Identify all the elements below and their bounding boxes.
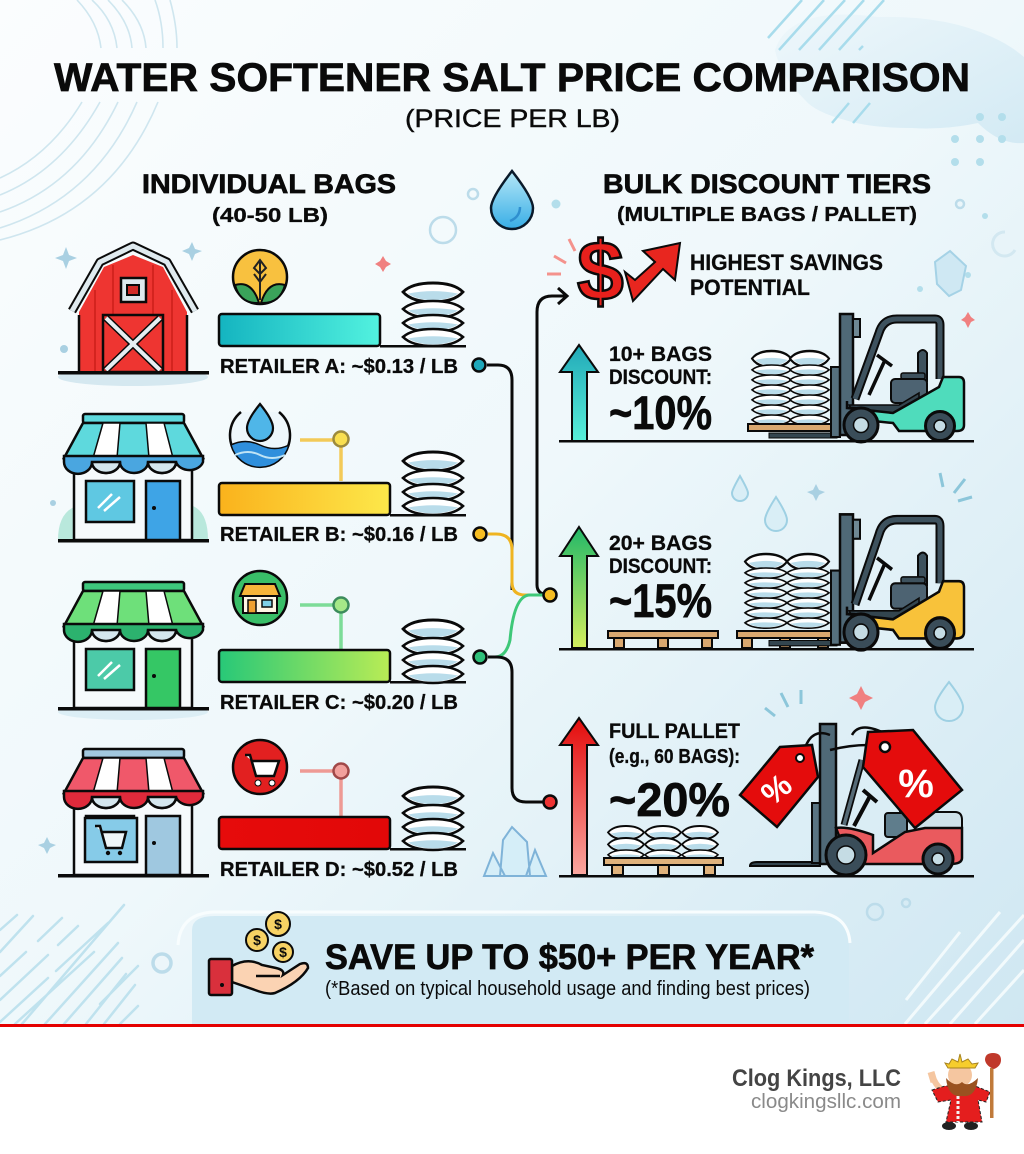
subtitle: (PRICE PER LB) [405, 105, 620, 133]
icon: salt bags [403, 787, 463, 850]
banner panel [192, 916, 849, 1024]
icon: cart badge [233, 740, 287, 794]
price label: RETAILER A: ~$0.13 / LB [220, 356, 458, 378]
heading: bulk discount tiers: BULK DISCOUNT TIERS [603, 169, 931, 199]
forklift yellow [769, 514, 964, 650]
connector accent [300, 764, 348, 817]
icon: salt bags [403, 452, 463, 515]
heading: individual bags [142, 169, 396, 227]
panel: 20+ bags tier [559, 514, 974, 650]
icon: storefront teal [58, 414, 209, 542]
connector dots [472, 358, 556, 808]
ground line [559, 440, 974, 442]
footer brand text [732, 1065, 901, 1113]
forklift red with price tags [740, 724, 962, 875]
icon: hand with coins: $ [253, 932, 261, 948]
tier text: 20+ BAGS [609, 532, 712, 555]
base line [390, 514, 466, 516]
icon: king mascot [931, 1053, 1001, 1130]
bag pallet [604, 826, 723, 875]
icon: shop badge [233, 571, 287, 625]
footer band [0, 1024, 1024, 1027]
tier text: (e.g., 60 BAGS): [609, 746, 740, 768]
tier text: 10+ BAGS [609, 343, 712, 366]
arrow [560, 345, 598, 441]
icon: salt bags [403, 283, 463, 346]
tier text: FULL PALLET [609, 720, 740, 743]
ground line [559, 648, 974, 650]
price bar [219, 817, 390, 849]
connector lines [487, 288, 567, 802]
icon: water drop [491, 171, 533, 229]
heading: individual bags: INDIVIDUAL BAGS [142, 169, 396, 199]
price label: RETAILER D: ~$0.52 / LB [220, 859, 458, 881]
tier text: DISCOUNT: [609, 555, 712, 578]
callout: savings banner [178, 912, 850, 1024]
icon: salt bags [403, 620, 463, 683]
icon: hand with coins: $ [279, 944, 287, 960]
forklift red with price tags: % [898, 762, 934, 806]
footer brand text: Clog Kings, LLC [732, 1065, 901, 1092]
ground line [559, 875, 974, 878]
icon: water badge [230, 404, 290, 467]
icon: red barn [58, 246, 209, 386]
label: HIGHEST SAVINGS [690, 250, 883, 275]
forklift teal [769, 314, 964, 442]
tier text: ~15% [609, 574, 712, 627]
tier text [609, 343, 712, 439]
savings headline: SAVE UP TO $50+ PER YEAR* [325, 938, 814, 977]
forklift red with price tags: % [754, 766, 799, 812]
price label: RETAILER B: ~$0.16 / LB [220, 524, 458, 546]
icon: hand with coins: $ [274, 916, 282, 932]
icon: dollar sign with arrow: $ [577, 224, 624, 318]
title: WATER SOFTENER SALT PRICE COMPARISON [54, 56, 970, 100]
bag pallet [737, 554, 833, 648]
footer brand text: clogkingsllc.com [751, 1091, 901, 1113]
panel: full pallet tier [559, 718, 974, 878]
icon: dollar sign with arrow [547, 224, 680, 318]
price bar [219, 650, 390, 682]
panel: retailer A [58, 246, 466, 386]
arrow [560, 718, 598, 875]
icon: crystal [935, 251, 966, 296]
connector accent [300, 432, 348, 481]
panel: retailer D [58, 740, 466, 881]
panel: retailer C [58, 571, 466, 720]
footnote: (*Based on typical household usage and finding best prices) [325, 978, 810, 1000]
icon: hand with coins [209, 912, 308, 995]
panel: 10+ bags tier [559, 314, 974, 442]
icon: storefront red [58, 749, 209, 878]
icon: salt crystals [484, 827, 546, 876]
heading: individual bags: (40-50 LB) [212, 205, 328, 227]
bag pallet [748, 351, 832, 431]
connector accent [300, 598, 348, 650]
price label: RETAILER C: ~$0.20 / LB [220, 692, 458, 714]
base line [390, 681, 466, 684]
heading: bulk discount tiers [603, 169, 931, 226]
price bar [219, 314, 380, 346]
label [690, 250, 883, 300]
tier text [609, 720, 740, 826]
price bar [219, 483, 390, 515]
tier text [609, 532, 712, 627]
tier text: ~20% [609, 773, 730, 826]
icon: storefront green [58, 582, 209, 720]
panel: retailer B [58, 404, 466, 546]
base line [390, 848, 466, 850]
label: POTENTIAL [690, 275, 810, 300]
panel: highest savings potential [547, 224, 883, 318]
empty pallet [608, 631, 718, 648]
tier text: ~10% [609, 386, 712, 439]
base line [380, 345, 466, 348]
heading: bulk discount tiers: (MULTIPLE BAGS / PALLET) [617, 204, 917, 226]
tier text: DISCOUNT: [609, 366, 712, 389]
icon: wheat badge [233, 250, 287, 304]
arrow [560, 527, 598, 648]
